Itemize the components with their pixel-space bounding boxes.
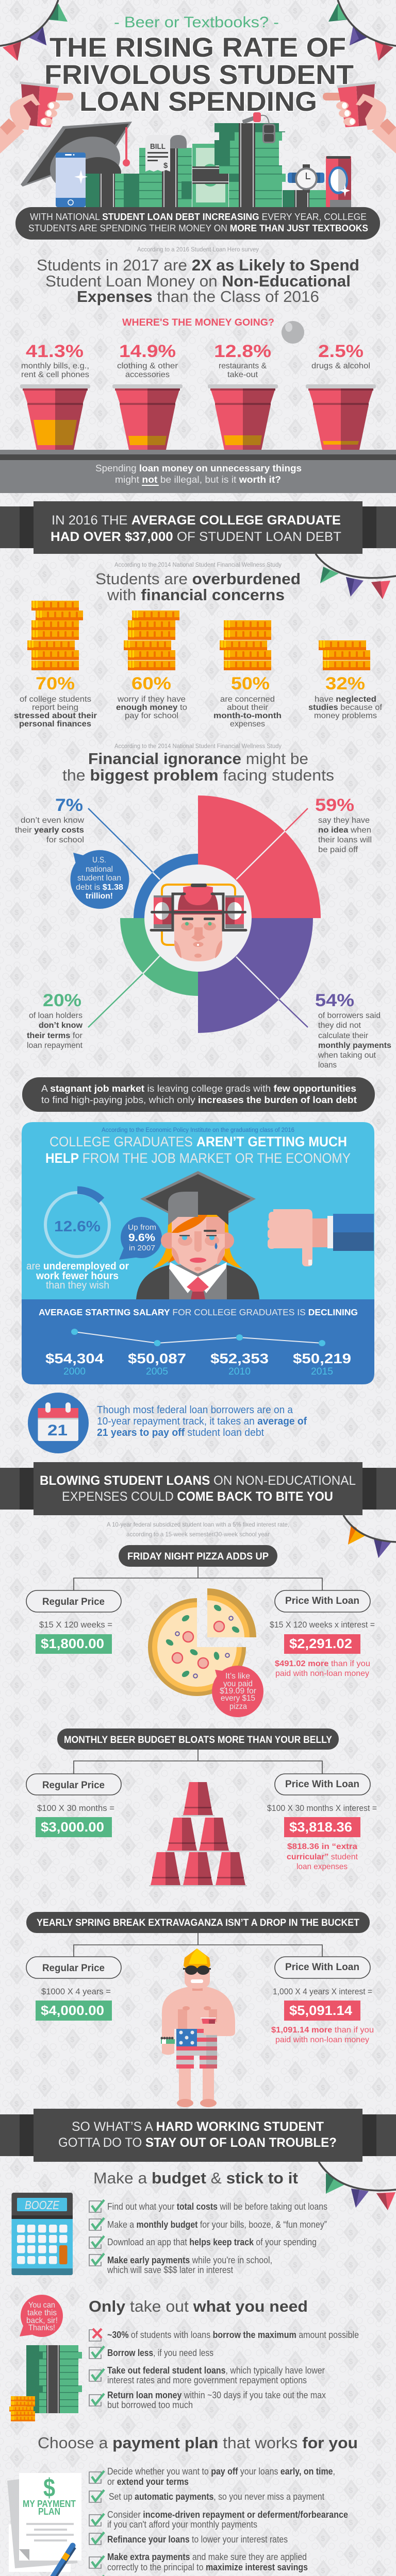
table and message band: might not be illegal, but is it worth it?: [115, 474, 281, 485]
intro pill with text: STUDENTS ARE SPENDING THEIR MONEY ON MORE THAN JUST TEXTBOOKS: [28, 223, 368, 233]
bubble: pizza cost: every $15: [221, 1694, 255, 1703]
underemployed text: than they wish: [46, 1280, 109, 1291]
panel heading: [45, 1134, 351, 1166]
stat 14.9%: accessories: [125, 370, 170, 379]
speech bubble: national debt: national: [86, 865, 113, 874]
main title: THE RISING RATE OF: [50, 32, 346, 63]
checklist: budget: which will save $$$ later in interest: [107, 2265, 233, 2275]
banner: stay out of loan trouble: SO WHAT’S A HARD WORKING STUDENT: [72, 2120, 324, 2134]
regular price column: Regular Price: [42, 1597, 105, 1607]
callout 59%: say they have: [318, 816, 370, 825]
stat 12.8%: take-out: [227, 370, 258, 379]
right hand holding red cup: [323, 81, 396, 154]
headline: [37, 256, 359, 306]
bubble: take this back: You can: [28, 2301, 55, 2310]
coin stack 32%: money problems: [314, 711, 377, 720]
speech bubble: national debt: trillion!: [86, 892, 113, 901]
coin stack 60%: pay for school: [125, 711, 178, 720]
comparison: spring break: [26, 1912, 374, 2107]
fine print: A 10-year federal subsidized student loan with a 5% fixed interest rate,: [107, 1521, 289, 1528]
fine print: [107, 1521, 289, 1538]
beer heading pill: MONTHLY BEER BUDGET BLOATS MORE THAN YOUR BELLY: [64, 1735, 332, 1745]
spring break man: [161, 1948, 235, 2107]
section: make a budget: [11, 2169, 327, 2275]
callout 7%: don’t even know: [21, 816, 84, 825]
bunting under second banner: [343, 1515, 396, 1558]
banner: stay out of loan trouble: [0, 2109, 396, 2162]
spring break heading pill: [26, 1912, 370, 1933]
subtitle: - Beer or Textbooks? -: [114, 14, 279, 31]
banner: average debt: IN 2016 THE AVERAGE COLLEGE GRADUATE: [52, 513, 341, 528]
price with loan column: loan expenses: [296, 1862, 348, 1871]
coin stack 70%: [14, 601, 97, 728]
banner: come back to bite you: EXPENSES COULD COME BACK TO BITE YOU: [62, 1489, 333, 1504]
checklist: payment plan: Consider income-driven repayment or deferment/forbearance: [107, 2510, 348, 2520]
bubble: take this back: back, sir!: [26, 2316, 58, 2325]
price with loan column: $3,818.36: [289, 1819, 352, 1835]
intro pill with text: WITH NATIONAL STUDENT LOAN DEBT INCREASING EVERY YEAR, COLLEGE: [30, 211, 367, 222]
price with loan column: 1,000 X 4 years X interest =: [273, 1987, 372, 1996]
money stack centre-left: [139, 148, 192, 207]
stat 2.5%: 2.5%: [318, 342, 364, 361]
price with loan column: $5,091.14: [289, 2003, 353, 2018]
callout 20%: of loan holders: [29, 1011, 82, 1020]
money stack left: [86, 174, 162, 207]
price with loan column: $100 X 30 months X interest =: [267, 1803, 377, 1813]
coin stack 60%: [116, 611, 187, 720]
speech bubble: national debt: U.S.: [92, 856, 106, 865]
coin stack 60%: enough money to: [116, 703, 187, 712]
salary values: $50,087: [128, 1351, 186, 1366]
payment plan document: $: [43, 2473, 55, 2502]
left hand holding red cup: [0, 81, 73, 154]
checklist: budget: Make a monthly budget for your bills, booze, & “fun money”: [107, 2219, 327, 2230]
panel: starting salary chart: [22, 1299, 374, 1384]
fine print: according to a 15-week semester/30-week school year: [126, 1531, 270, 1538]
banner: come back to bite you: BLOWING STUDENT LOANS ON NON-EDUCATIONAL: [40, 1473, 356, 1488]
coin stack 50%: month-to-month: [213, 711, 282, 720]
years: 2010: [228, 1366, 251, 1377]
heading: Make a budget & stick to it: [93, 2169, 298, 2187]
price with loan column: $1,091.14 more than if you: [271, 2026, 374, 2035]
stagnant job market pill: [22, 1077, 375, 1112]
bunting under third banner: [319, 2162, 396, 2210]
headline: Expenses than the Class of 2016: [77, 287, 319, 306]
regular price column: $4,000.00: [41, 2003, 104, 2018]
source note: According to the 2014 National Student Financial Wellness Study: [114, 743, 282, 750]
regular price column: Regular Price: [42, 1780, 105, 1791]
callout 20%: 20%: [43, 991, 81, 1010]
repayment text: [97, 1404, 307, 1438]
callout 54%: when taking out: [318, 1051, 376, 1060]
graduation cap: [21, 122, 132, 200]
underemployed text: [26, 1261, 129, 1291]
coin stack 50%: [213, 620, 282, 728]
pizza illustration: [148, 1588, 256, 1696]
price with loan column: $818.36 in “extra: [287, 1842, 357, 1851]
price with loan column: Price With Loan: [285, 1962, 359, 1973]
checklist: payment plan: if you can't afford your monthly payments: [107, 2519, 257, 2530]
comparison: beer: [26, 1728, 377, 1887]
beer heading pill: [57, 1728, 339, 1750]
section: financial concerns: [14, 562, 383, 728]
price with loan column: Price With Loan: [285, 1779, 359, 1790]
main title: FRIVOLOUS STUDENT: [44, 60, 354, 90]
bill receipt: $: [163, 161, 168, 170]
callout 7%: their yearly costs: [15, 826, 84, 835]
pizza heading pill: [119, 1545, 277, 1567]
speech bubble: national debt: [70, 850, 129, 909]
stat 12.8%: 12.8%: [214, 342, 271, 361]
callout 54%: loans: [318, 1061, 337, 1070]
callout 59%: be paid off: [318, 845, 358, 854]
coin stack 60%: worry if they have: [117, 695, 186, 704]
bunting under first banner: [316, 554, 396, 599]
table and message band: [0, 450, 396, 493]
bubble: up from 9.6%: 9.6%: [128, 1232, 155, 1244]
price with loan column: $15 X 120 weeks x interest =: [270, 1620, 375, 1630]
heading: the biggest problem facing students: [62, 766, 334, 784]
speech bubble: national debt: debt is $1.38: [76, 883, 123, 892]
regular price column: $1000 X 4 years =: [41, 1987, 111, 1996]
checklist: borrow: Take out federal student loans, which typically have lower: [107, 2365, 325, 2376]
callout 54%: calculate their: [318, 1031, 369, 1040]
price with loan column: paid with non-loan money: [275, 2036, 369, 2044]
callout 20%: their terms for: [27, 1031, 83, 1040]
chart title: AVERAGE STARTING SALARY FOR COLLEGE GRADUATES IS DECLINING: [39, 1307, 358, 1317]
checklist: payment plan: Decide whether you want to pay off your loans early, on time,: [107, 2466, 335, 2477]
stat 14.9%: 14.9%: [119, 342, 176, 361]
heading: with financial concerns: [107, 586, 285, 604]
ping pong ball: [282, 321, 304, 344]
price with loan column: paid with non-loan money: [275, 1669, 369, 1678]
bubble: up from 9.6%: in 2007: [129, 1244, 155, 1252]
regular price column: [26, 1957, 121, 2021]
coin stack 50%: are concerned: [220, 695, 275, 704]
payment plan document: MY PAYMENT: [23, 2499, 76, 2509]
banner: come back to bite you: [0, 1462, 396, 1515]
headline: Student Loan Money on Non-Educational: [45, 272, 351, 290]
checklist: budget: Make early payments while you're in school,: [107, 2255, 272, 2265]
radial chart: [88, 795, 321, 1033]
section: only take out what you need: [9, 2295, 359, 2421]
line chart: [71, 1329, 325, 1346]
subheading: WHERE'S THE MONEY GOING?: [122, 317, 274, 328]
payment plan document: PLAN: [38, 2506, 60, 2517]
thumbs down hand: [268, 1209, 374, 1266]
checklist: borrow: Borrow less, if you need less: [107, 2348, 213, 2358]
coin stack 32%: have neglected: [315, 695, 376, 704]
coin stack 50%: about their: [227, 703, 269, 712]
icon: calendar 21: [28, 1393, 89, 1453]
callout 20%: don’t know: [39, 1021, 83, 1030]
callout 59%: no idea when: [318, 826, 371, 835]
stat 14.9%: [112, 342, 183, 450]
heading: Choose a payment plan that works for you: [38, 2434, 358, 2452]
coin stack 32%: 32%: [325, 674, 365, 693]
panel heading: HELP FROM THE JOB MARKET OR THE ECONOMY: [45, 1150, 351, 1166]
tree connector: [74, 1750, 322, 1774]
checklist: budget: [89, 2200, 327, 2275]
comparison: pizza: [26, 1545, 375, 1717]
callout 54%: of borrowers said: [318, 1011, 381, 1020]
heading: [95, 570, 301, 604]
callout 59%: 59%: [315, 795, 354, 815]
header section: [0, 0, 396, 240]
years: 2000: [63, 1366, 86, 1377]
callout 7%: 7%: [55, 795, 83, 815]
price with loan column: [267, 1774, 377, 1871]
price with loan column: [271, 1957, 374, 2044]
student with beer helmet: [151, 884, 246, 961]
callout 54%: 54%: [315, 991, 354, 1010]
coin stack 70%: report being: [32, 703, 78, 712]
panel: job market and economy: [22, 1122, 374, 1299]
years: 2005: [146, 1366, 168, 1377]
regular price column: [26, 1774, 121, 1837]
coin stack 50%: 50%: [231, 674, 270, 693]
coin stack 60%: 60%: [131, 674, 171, 693]
callout 54%: [315, 991, 391, 1070]
stat 12.8%: [208, 342, 278, 450]
coin stack 70%: 70%: [36, 674, 75, 693]
callout 20%: [27, 991, 83, 1050]
coin stack 70%: personal finances: [19, 720, 91, 728]
checklist: payment plan: Refinance your loans to lower your interest rates: [107, 2534, 288, 2545]
pizza heading pill: FRIDAY NIGHT PIZZA ADDS UP: [127, 1551, 269, 1562]
donut 12.6%: 12.6%: [54, 1218, 101, 1235]
icon: calculator: BOOZE: [25, 2198, 60, 2212]
survey source: According to a 2016 Student Loan Hero survey: [137, 247, 259, 253]
section: financial ignorance: [15, 743, 391, 1070]
source note: According to the Economic Policy Institute on the graduating class of 2016: [102, 1127, 294, 1133]
heading: Financial ignorance might be: [88, 750, 308, 768]
years: 2015: [311, 1366, 333, 1377]
spring break heading pill: YEARLY SPRING BREAK EXTRAVAGANZA ISN’T A DROP IN THE BUCKET: [37, 1918, 359, 1928]
bubble: up from 9.6%: [119, 1217, 162, 1260]
regular price column: $3,000.00: [41, 1819, 104, 1835]
icon: calendar 21: 21: [47, 1422, 68, 1439]
coin stack 32%: [308, 640, 383, 720]
repayment text: Though most federal loan borrowers are on a: [97, 1404, 293, 1416]
bubble: pizza cost: pizza: [229, 1702, 247, 1711]
checklist: payment plan: [89, 2466, 348, 2576]
price with loan column: Price With Loan: [285, 1596, 359, 1606]
phone: [56, 152, 88, 207]
single dollar bill: [192, 144, 228, 207]
price with loan column: curricular” student: [287, 1853, 358, 1861]
headline: Students in 2017 are 2X as Likely to Spend: [37, 256, 359, 274]
bubble: take this back: Thanks!: [28, 2324, 55, 2332]
callout 59%: [315, 795, 372, 854]
checklist: payment plan: or extend your terms: [107, 2477, 189, 2487]
callout 7%: [15, 795, 84, 844]
checklist: payment plan: Make extra payments and make sure they are applied: [107, 2552, 307, 2562]
underemployed text: are underemployed or: [26, 1261, 129, 1272]
bubble: take this back: take this: [27, 2309, 57, 2317]
main title: LOAN SPENDING: [79, 87, 317, 117]
regular price column: $15 X 120 weeks =: [39, 1620, 112, 1630]
checklist: borrow: Return loan money within ~30 days if you take out the max: [107, 2390, 326, 2400]
salary values: [45, 1351, 351, 1366]
tree connector: [74, 1567, 322, 1590]
coin stack 70%: stressed about their: [14, 711, 97, 720]
regular price column: $100 X 30 months =: [37, 1803, 114, 1813]
stat 2.5%: drugs & alcohol: [311, 362, 370, 370]
stacked cup pyramid: [149, 1782, 247, 1887]
bill receipt: [145, 135, 187, 172]
panel heading: COLLEGE GRADUATES AREN’T GETTING MUCH: [50, 1134, 347, 1149]
price with loan column: $2,291.02: [289, 1636, 352, 1651]
checklist: payment plan: Set up automatic payments, so you never miss a payment: [109, 2492, 324, 2502]
repayment text: 10-year repayment track, it takes an average of: [97, 1416, 307, 1427]
stat 2.5%: [306, 342, 376, 450]
regular price column: [26, 1590, 121, 1654]
stat 41.3%: monthly bills, e.g.,: [21, 362, 89, 370]
callout 54%: they did not: [318, 1021, 361, 1030]
checklist: borrow: ~30% of students with loans borrow the maximum amount possible: [107, 2330, 359, 2340]
checklist: payment plan: correctly to the principal to maximize interest savings: [107, 2562, 308, 2572]
salary values: $54,304: [45, 1351, 104, 1366]
beer can: [326, 156, 351, 207]
callout 7%: for school: [46, 836, 84, 844]
money stack with coins: [9, 2345, 82, 2421]
checklist: budget: Find out what your total costs will be before taking out loans: [107, 2201, 327, 2212]
bill receipt: BILL: [150, 142, 166, 151]
stagnant job market pill: A stagnant job market is leaving college grads with few opportunities: [41, 1083, 356, 1094]
bubble: pizza cost: [212, 1666, 263, 1717]
checklist: borrow: but borrowed too much: [107, 2400, 193, 2410]
checklist: borrow: [89, 2329, 359, 2410]
repayment text: 21 years to pay off student loan debt: [97, 1427, 264, 1438]
banner: stay out of loan trouble: GOTTA DO TO STAY OUT OF LOAN TROUBLE?: [58, 2136, 337, 2150]
intro pill with text: [15, 207, 380, 240]
callout 54%: monthly payments: [318, 1041, 391, 1050]
stat 12.8%: restaurants &: [219, 362, 267, 370]
price with loan column: [270, 1590, 375, 1678]
banner: average debt: [0, 501, 396, 554]
callout 59%: their loans will: [318, 836, 372, 844]
table and message band: Spending loan money on unnecessary things: [95, 463, 302, 473]
price with loan column: $491.02 more than if you: [275, 1659, 370, 1668]
money stack right with key fob: [214, 112, 286, 207]
regular price column: $1,800.00: [41, 1636, 104, 1651]
stat 41.3%: [20, 342, 90, 450]
crying graduate: [136, 1171, 259, 1299]
watch: [288, 164, 324, 193]
right party bunting: [328, 0, 396, 61]
stat 14.9%: clothing & other: [117, 362, 178, 370]
callout 20%: loan repayment: [27, 1041, 83, 1050]
left party bunting: [0, 0, 68, 61]
bubble: pizza cost: $19.09 for: [220, 1687, 256, 1696]
stagnant job market pill: to find high-paying jobs, which only increases the burden of loan debt: [41, 1095, 357, 1105]
bubble: up from 9.6%: Up from: [128, 1223, 156, 1232]
heading: Students are overburdened: [95, 570, 301, 588]
coin stack 70%: of college students: [20, 695, 91, 704]
regular price column: Regular Price: [42, 1963, 105, 1974]
speech bubble: national debt: student loan: [77, 874, 121, 883]
payment plan document: [7, 2473, 81, 2576]
checklist: budget: Download an app that helps keep track of your spending: [107, 2237, 317, 2247]
coin stack 32%: studies because of: [308, 703, 383, 712]
salary values: $50,219: [293, 1351, 351, 1366]
salary values: $52,353: [210, 1351, 269, 1366]
bubble: pizza cost: you paid: [223, 1680, 253, 1688]
icon: calculator: [11, 2193, 73, 2275]
years: [63, 1366, 333, 1377]
banner: average debt: HAD OVER $37,000 OF STUDENT LOAN DEBT: [51, 530, 341, 544]
heading: [62, 750, 334, 784]
section: where's the money going: [0, 247, 396, 493]
bubble: pizza cost: It’s like: [225, 1672, 250, 1681]
underemployed text: work fewer hours: [36, 1270, 119, 1282]
stat 41.3%: 41.3%: [26, 342, 84, 361]
bubble: take this back: [20, 2295, 63, 2337]
tree connector: [74, 1933, 322, 1957]
checklist: borrow: interest rates and more government repayment options: [107, 2375, 307, 2385]
heading: Only take out what you need: [89, 2297, 308, 2315]
source note: According to the 2014 National Student Financial Wellness Study: [114, 562, 282, 568]
section: choose a payment plan: [7, 2434, 358, 2576]
money stack by watch: [283, 190, 334, 207]
donut 12.6%: [45, 1190, 109, 1257]
main title: [44, 32, 354, 117]
stat 41.3%: rent & cell phones: [21, 370, 89, 379]
coin stack 50%: expenses: [230, 720, 265, 728]
